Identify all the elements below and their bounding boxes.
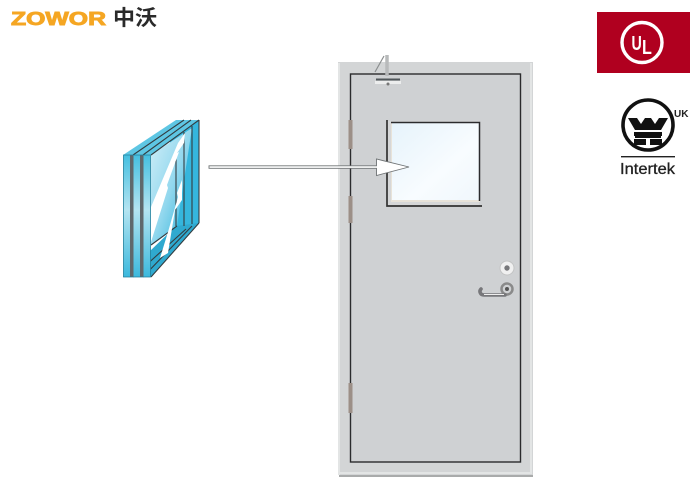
glass: bottom edge: [123, 223, 199, 277]
glass: top edge: [123, 120, 199, 155]
window: frame lines: [387, 120, 482, 206]
door: hinges: [348, 120, 352, 413]
glass: rear pane faces: [170, 120, 199, 235]
arrow: glass to window: [209, 159, 409, 176]
badge: UL certification: L: [642, 35, 652, 58]
glass: main pane: [151, 128, 192, 245]
glass: crack highlights: [151, 133, 185, 242]
logo: ZOWOR 中沃: ZOWOR: [11, 9, 106, 29]
door: lock cylinder: [500, 261, 514, 275]
badge: UL certification: [597, 12, 690, 73]
logo: ZOWOR 中沃: [11, 7, 157, 30]
logo: ZOWOR 中沃: 中沃: [113, 7, 157, 30]
door: leaf: [350, 74, 520, 462]
badge: UL certification: U: [632, 31, 642, 55]
glass: front edge strips: [124, 155, 130, 277]
door: frame highlight: [339, 63, 532, 475]
window: glass pane: [392, 123, 479, 200]
badge: Intertek UK mark: Intertek: [620, 161, 675, 178]
illustration: laminated fire glass: [123, 120, 199, 277]
illustration: fire door: [338, 55, 533, 477]
badge: Intertek UK mark: [620, 100, 689, 178]
door: closer: [375, 55, 401, 86]
door: shadow: [339, 473, 533, 477]
door: lever handle: [480, 284, 512, 295]
door: outer frame: [338, 62, 533, 475]
badge: Intertek UK mark: UK: [674, 109, 689, 120]
glass: rear and edge lines: [133, 120, 199, 277]
